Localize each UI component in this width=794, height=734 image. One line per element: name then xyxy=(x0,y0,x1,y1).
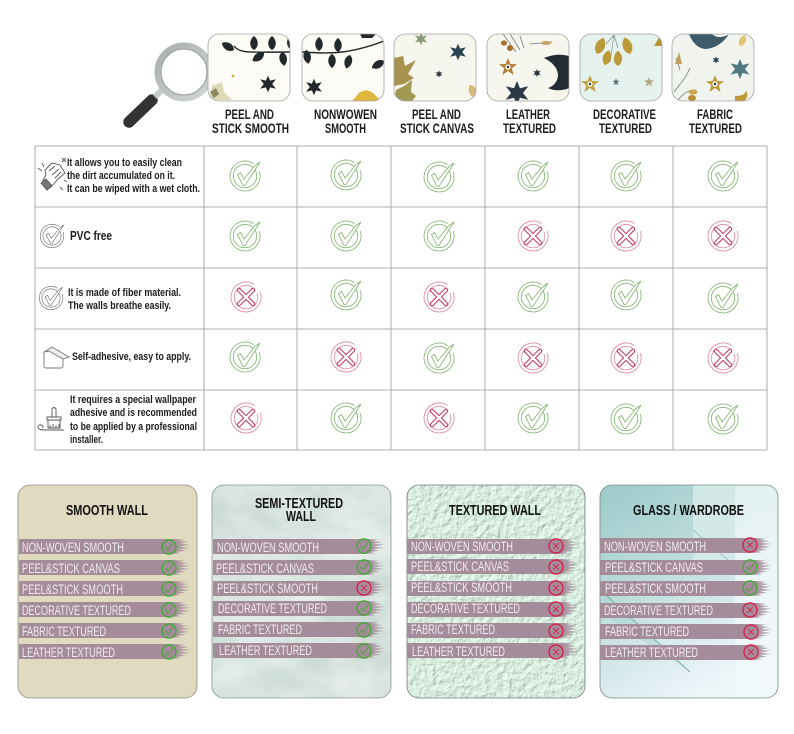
heading: semi-textured wall xyxy=(255,496,343,525)
row: fabric textured xyxy=(407,622,579,638)
icon: no peel and stick smooth xyxy=(231,403,261,433)
row: decorative textured: DECORATIVE TEXTURED xyxy=(604,603,713,618)
heading: peel and stick smooth: PEEL AND xyxy=(225,107,274,122)
icon: yes fabric textured xyxy=(708,161,738,191)
row: non-woven smooth: NON-WOVEN SMOOTH xyxy=(22,540,124,555)
panel: smooth wall xyxy=(18,485,197,698)
wallpaper thumbnail: leather textured xyxy=(487,34,569,105)
row: fabric textured: FABRIC TEXTURED xyxy=(411,622,495,637)
text: PVC free: PVC free xyxy=(70,228,112,243)
icon: no fabric textured xyxy=(708,221,738,251)
text: fiber material xyxy=(68,287,181,312)
heading: fabric textured: TEXTURED xyxy=(689,121,742,136)
heading: semi-textured wall: SEMI-TEXTURED xyxy=(255,496,343,512)
text: special adhesive: adhesive and is recommended xyxy=(70,407,197,419)
row: non-woven smooth: NON-WOVEN SMOOTH xyxy=(604,539,706,554)
icon: yes peel and stick smooth xyxy=(230,221,260,251)
heading: leather textured xyxy=(503,107,556,136)
icon: yes peel and stick smooth xyxy=(230,161,260,191)
wallpaper thumbnail: fabric textured xyxy=(672,34,754,101)
icon: peeling sheet xyxy=(44,347,69,368)
row: decorative textured: DECORATIVE TEXTURED xyxy=(218,601,327,616)
icon: yes nonwoven smooth xyxy=(331,160,361,190)
wallpaper thumbnail: peel and stick smooth xyxy=(208,34,296,101)
row: fabric textured: FABRIC TEXTURED xyxy=(605,624,689,639)
wallpaper thumbnail: peel and stick canvas xyxy=(394,33,480,101)
icon: no peel and stick canvas xyxy=(424,282,454,312)
heading: nonwoven smooth xyxy=(314,107,377,136)
heading: smooth wall: SMOOTH WALL xyxy=(66,503,148,519)
row: peel and stick smooth: PEEL&STICK SMOOTH xyxy=(22,582,123,597)
row: peel and stick canvas: PEEL&STICK CANVAS xyxy=(411,559,509,574)
row: non-woven smooth: NON-WOVEN SMOOTH xyxy=(217,540,319,555)
row: decorative textured: DECORATIVE TEXTURED xyxy=(22,603,131,618)
row: leather textured: LEATHER TEXTURED xyxy=(412,644,505,659)
panel: glass / wardrobe xyxy=(600,485,778,698)
panel: textured wall xyxy=(407,485,585,698)
heading: leather textured: LEATHER xyxy=(506,107,550,122)
icon: grey check xyxy=(39,286,63,310)
icon: yes leather textured xyxy=(518,403,548,433)
row: peel and stick canvas: PEEL&STICK CANVAS xyxy=(216,561,314,576)
heading: semi-textured wall: WALL xyxy=(286,509,316,525)
heading: decorative textured xyxy=(593,107,656,136)
heading: glass / wardrobe: GLASS / WARDROBE xyxy=(633,503,744,519)
text: fiber material: It is made of fiber material. xyxy=(68,287,181,299)
row: easy to clean xyxy=(38,157,738,195)
row: non-woven smooth: NON-WOVEN SMOOTH xyxy=(411,539,513,554)
text: easy to clean xyxy=(67,157,200,195)
row: special adhesive xyxy=(38,394,738,446)
row: fabric textured: FABRIC TEXTURED xyxy=(22,624,106,639)
row: fabric textured xyxy=(19,623,191,639)
heading: decorative textured: DECORATIVE xyxy=(593,107,656,122)
row: leather textured: LEATHER TEXTURED xyxy=(605,645,698,660)
heading: fabric textured xyxy=(689,107,742,136)
icon: yes decorative textured xyxy=(611,161,641,191)
row: self-adhesive xyxy=(44,342,738,373)
row: leather textured: LEATHER TEXTURED xyxy=(219,643,312,658)
heading: nonwoven smooth: SMOOTH xyxy=(325,121,366,136)
row: fabric textured: FABRIC TEXTURED xyxy=(218,622,302,637)
heading: textured wall: TEXTURED WALL xyxy=(449,503,541,519)
row: leather textured: LEATHER TEXTURED xyxy=(22,645,115,660)
text: easy to clean: the dirt accumulated on it. xyxy=(67,170,175,182)
text: special adhesive: to be applied by a professional xyxy=(70,421,197,433)
icon: yes leather textured xyxy=(518,282,548,312)
icon: grey check xyxy=(40,224,64,248)
heading: peel and stick smooth: STICK SMOOTH xyxy=(212,121,289,136)
row: fiber material xyxy=(39,280,738,313)
text: special adhesive: installer. xyxy=(70,434,103,446)
icon: no decorative textured xyxy=(611,221,641,251)
column headings xyxy=(212,107,742,136)
icon: yes peel and stick canvas xyxy=(424,162,454,192)
icon: paste brush xyxy=(38,408,64,430)
panel: semi-textured wall xyxy=(212,485,391,698)
text: easy to clean: It can be wiped with a wet cloth. xyxy=(67,183,200,195)
icon: yes fabric textured xyxy=(708,404,738,434)
heading: peel and stick canvas: PEEL AND xyxy=(412,107,461,122)
text: self-adhesive: Self-adhesive, easy to apply. xyxy=(72,351,191,363)
icon: no leather textured xyxy=(518,343,548,373)
heading: peel and stick canvas: STICK CANVAS xyxy=(400,121,474,136)
row: decorative textured: DECORATIVE TEXTURED xyxy=(411,601,520,616)
row: peel and stick smooth: PEEL&STICK SMOOTH xyxy=(217,581,318,596)
text: fiber material: The walls breathe easily. xyxy=(68,300,171,312)
icon: yes peel and stick canvas xyxy=(424,221,454,251)
icon: yes decorative textured xyxy=(611,404,641,434)
text: special adhesive xyxy=(70,394,197,446)
icon: yes fabric textured xyxy=(708,283,738,313)
row: peel and stick smooth: PEEL&STICK SMOOTH xyxy=(411,580,512,595)
heading: fabric textured: FABRIC xyxy=(697,107,733,122)
heading: decorative textured: TEXTURED xyxy=(599,121,652,136)
heading: peel and stick smooth xyxy=(212,107,289,136)
text: special adhesive: It requires a special wallpaper xyxy=(70,394,197,406)
wallpaper thumbnail: decorative textured xyxy=(580,34,664,101)
icon: yes leather textured xyxy=(518,161,548,191)
comparison table xyxy=(35,146,767,450)
row: PVC free xyxy=(40,221,738,251)
icon: yes nonwoven smooth xyxy=(331,403,361,433)
row: peel and stick smooth: PEEL&STICK SMOOTH xyxy=(605,581,706,596)
heading: nonwoven smooth: NONWOWEN xyxy=(314,107,377,122)
icon: no decorative textured xyxy=(611,343,641,373)
icon: no leather textured xyxy=(518,221,548,251)
icon: no peel and stick smooth xyxy=(231,282,261,312)
icon: yes peel and stick smooth xyxy=(230,342,260,372)
icon: yes nonwoven smooth xyxy=(331,280,361,310)
icon: wiping glove xyxy=(38,158,67,190)
wallpaper thumbnail: nonwoven smooth xyxy=(302,34,386,101)
text: easy to clean: It allows you to easily clean xyxy=(67,157,182,169)
row: peel and stick canvas: PEEL&STICK CANVAS xyxy=(22,561,120,576)
icon: no fabric textured xyxy=(708,343,738,373)
icon: no peel and stick canvas xyxy=(424,403,454,433)
icon: yes decorative textured xyxy=(611,280,641,310)
heading: peel and stick canvas xyxy=(400,107,474,136)
icon: yes peel and stick canvas xyxy=(424,343,454,373)
row: peel and stick canvas: PEEL&STICK CANVAS xyxy=(605,560,703,575)
icon: yes nonwoven smooth xyxy=(331,221,361,251)
icon: magnifying glass xyxy=(129,46,210,122)
icon: no nonwoven smooth xyxy=(331,342,361,372)
heading: leather textured: TEXTURED xyxy=(503,121,556,136)
